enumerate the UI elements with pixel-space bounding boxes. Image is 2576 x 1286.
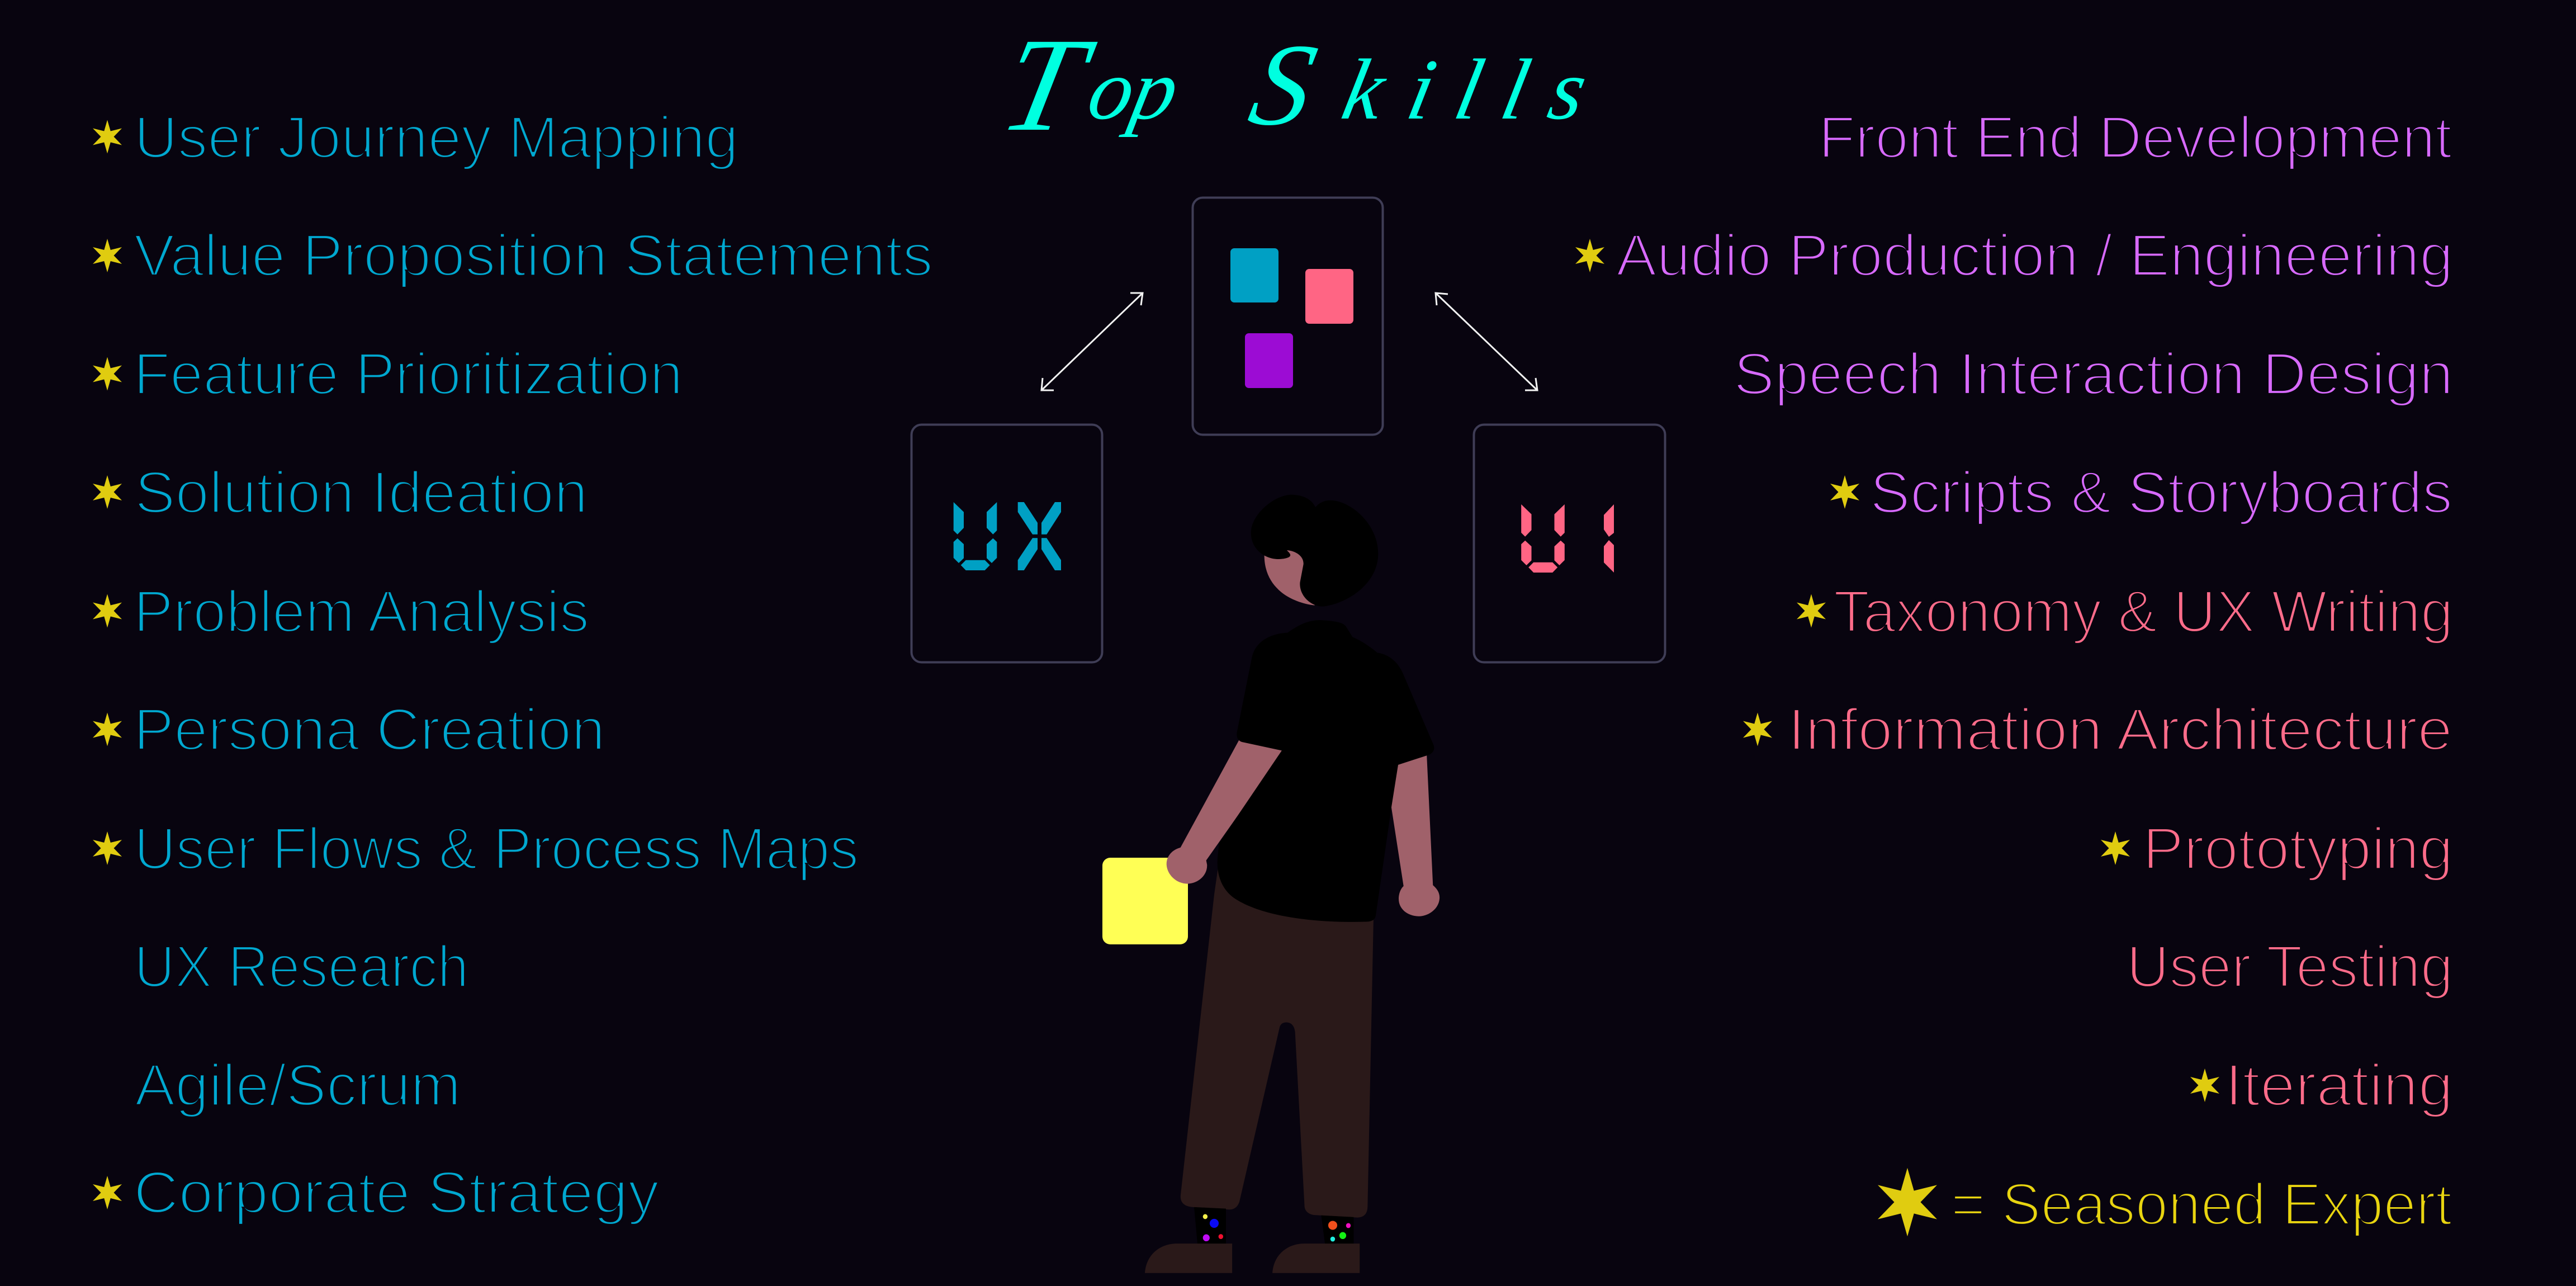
skill: UX Research: UX Research (134, 934, 468, 1000)
skill: Audio Production / Engineering: Audio Production / Engineering (1616, 223, 2453, 289)
panel: left skills column (93, 105, 933, 1226)
arrow: components to UI (1436, 293, 1537, 390)
skill: Iterating: Iterating (2225, 1052, 2453, 1118)
icon: UX segmented letters (954, 502, 1061, 570)
skill: Corporate Strategy: Corporate Strategy (134, 1160, 659, 1226)
arrow: components to UX (1041, 293, 1143, 390)
skill: Speech Interaction Design: Speech Interaction Design (1734, 341, 2453, 407)
skill: Information Architecture: Information Architecture (1788, 697, 2452, 763)
skill: User Journey Mapping: User Journey Mapping (134, 105, 738, 171)
illustration: person (1102, 495, 1439, 1273)
yellow notepad (1102, 858, 1188, 944)
skill: Feature Prioritization: Feature Prioritization (134, 341, 683, 407)
skill: Problem Analysis: Problem Analysis (134, 579, 589, 645)
tile: purple (1245, 333, 1293, 388)
title: kills (1335, 41, 1595, 138)
legend: seasoned expert: = Seasoned Expert (1951, 1171, 2452, 1237)
tile: teal (1230, 248, 1278, 302)
torso, arms and head (1167, 495, 1439, 922)
title: T (991, 11, 1105, 159)
icon: UI segmented letters (1521, 504, 1614, 573)
legs and feet (1145, 864, 1375, 1273)
skill: Prototyping: Prototyping (2143, 816, 2453, 882)
card: components (1193, 198, 1383, 435)
skill: Persona Creation: Persona Creation (134, 697, 605, 763)
card: UI (1474, 425, 1665, 662)
title: S (1240, 20, 1327, 149)
card: UX (911, 425, 1102, 662)
skill: Front End Development: Front End Development (1819, 105, 2452, 171)
skill: Scripts & Storyboards: Scripts & Storyboards (1870, 460, 2452, 526)
tile: pink (1305, 269, 1353, 324)
skill: Taxonomy & UX Writing: Taxonomy & UX Writing (1834, 579, 2453, 645)
title: op (1081, 41, 1187, 138)
skill: User Flows & Process Maps: User Flows & Process Maps (134, 816, 859, 882)
skill: Agile/Scrum: Agile/Scrum (135, 1052, 461, 1118)
skill: User Testing: User Testing (2127, 934, 2453, 1000)
skill: Value Proposition Statements: Value Proposition Statements (134, 223, 933, 289)
skill: Solution Ideation: Solution Ideation (135, 460, 588, 526)
panel: right skills column (1575, 105, 2453, 1237)
